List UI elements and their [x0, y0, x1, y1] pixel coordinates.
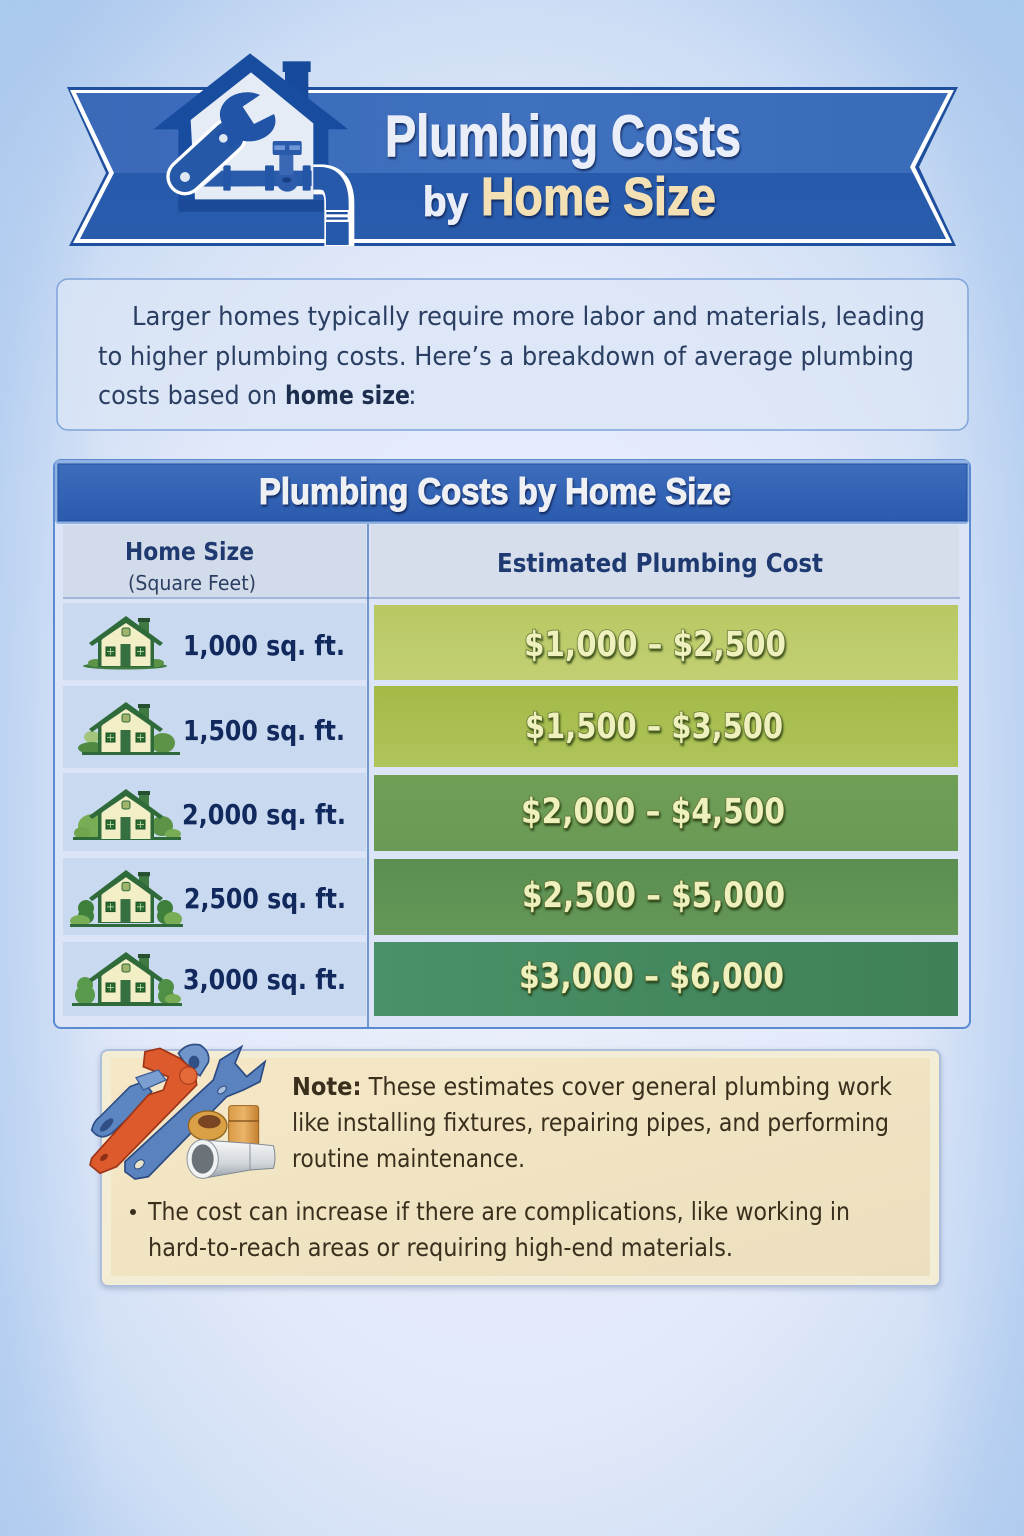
- icon: plumbing tools: [90, 1044, 275, 1179]
- column header: home size: (Square Feet): [128, 571, 256, 595]
- intro text panel: Larger homes typically require more labor and materials, leading: [132, 302, 925, 332]
- intro text panel: to higher plumbing costs. Here’s a breakdown of average plumbing: [98, 342, 914, 372]
- note text: hard-to-reach areas or requiring high-end materials.: [148, 1233, 733, 1262]
- row: 1,000 sq. ft.: 1,000 sq. ft.: [183, 629, 345, 662]
- blue open-end wrench: [125, 1047, 265, 1179]
- copper fittings: [188, 1106, 259, 1146]
- note panel: [90, 1044, 940, 1286]
- rear blue pipe wrench: [92, 1044, 209, 1137]
- note text: [130, 1072, 892, 1262]
- note text: like installing fixtures, repairing pipes, and performing: [292, 1108, 889, 1137]
- icon: wrench: [180, 92, 275, 182]
- column header: home size: Home Size: [125, 537, 254, 566]
- row: 1,000 sq. ft.: [63, 603, 958, 680]
- row: 2,000 sq. ft.: [63, 773, 958, 851]
- row: 1,500 sq. ft.: [63, 686, 958, 768]
- row: 2,000 sq. ft.: 2,000 sq. ft.: [182, 798, 346, 831]
- intro text panel: home size: [285, 381, 410, 411]
- row: 2,500 sq. ft.: [63, 858, 958, 935]
- row: 3,000 sq. ft.: 3,000 sq. ft.: [183, 963, 346, 996]
- icon: house 2500: [70, 870, 183, 927]
- cost table: [54, 460, 970, 1028]
- silver pipe: [187, 1140, 275, 1178]
- intro text panel: [57, 279, 968, 430]
- title text: by: [423, 178, 469, 225]
- row: 1,500 sq. ft.: 1,500 sq. ft.: [183, 714, 345, 747]
- table header bar: [55, 460, 969, 524]
- row: 2,000 sq. ft.: $2,000 – $4,500: [521, 792, 785, 832]
- icon: house 1500: [78, 702, 180, 755]
- column header: estimated cost: Estimated Plumbing Cost: [497, 549, 823, 579]
- icon: house with wrench and pipe: [153, 53, 349, 246]
- icon: house 2000: [73, 789, 181, 840]
- note text: Note: These estimates cover general plumbing work: [292, 1072, 892, 1101]
- title text: Plumbing Costs: [385, 104, 741, 169]
- column header: home size: [63, 525, 366, 597]
- icon: pipe: [203, 141, 349, 246]
- row: 1,000 sq. ft.: $1,000 – $2,500: [524, 625, 786, 665]
- title text: Home Size: [481, 167, 716, 227]
- icon: house 1000: [83, 616, 167, 670]
- red wrench: [90, 1048, 197, 1173]
- title text: [385, 104, 741, 227]
- row: 2,500 sq. ft.: 2,500 sq. ft.: [184, 882, 346, 915]
- title banner: [67, 53, 958, 246]
- icon: house 3000: [72, 952, 182, 1006]
- row: 1,500 sq. ft.: $1,500 – $3,500: [525, 707, 783, 747]
- table header bar: Plumbing Costs by Home Size: [259, 471, 731, 512]
- row: 3,000 sq. ft.: $3,000 – $6,000: [519, 957, 784, 997]
- note text: routine maintenance.: [292, 1144, 525, 1173]
- row: 3,000 sq. ft.: [63, 942, 958, 1016]
- intro text panel: :: [408, 381, 417, 411]
- column header: estimated cost: [371, 525, 959, 597]
- intro text panel: costs based on: [98, 381, 277, 411]
- note text: The cost can increase if there are complications, like working in: [147, 1197, 850, 1226]
- row: 2,500 sq. ft.: $2,500 – $5,000: [522, 876, 785, 916]
